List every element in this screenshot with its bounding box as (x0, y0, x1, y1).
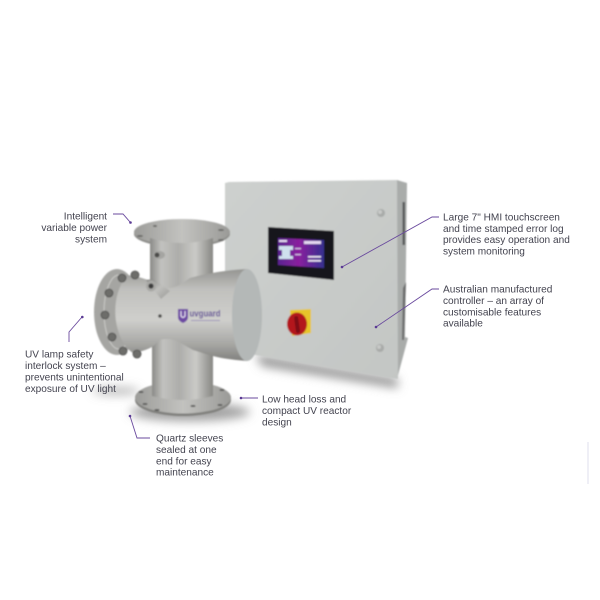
uvguard logo (178, 308, 220, 323)
small sensor port (158, 314, 162, 318)
callout text: customisable features (443, 308, 541, 318)
callout text: Low head loss and (262, 394, 346, 406)
callout text: design (262, 418, 292, 428)
controller cabinet (225, 180, 408, 379)
lower screw (376, 344, 384, 352)
product photo: UV reactor and controller (92, 180, 408, 421)
callout text: sealed at one (156, 445, 217, 456)
upper screw (377, 209, 385, 217)
upper flange (134, 219, 230, 247)
callout text: controller – an array of (443, 296, 544, 307)
callout text: interlock system – (25, 361, 106, 372)
leader line (240, 397, 258, 399)
leader line (129, 415, 150, 438)
callout: Australian manufactured controller (375, 284, 552, 330)
callout text: Large 7" HMI touchscreen (443, 212, 560, 224)
leader line (375, 289, 439, 328)
flange bolts (101, 271, 141, 358)
callout: quartz sleeves (129, 415, 223, 478)
leader line (69, 316, 84, 342)
isolator switch (287, 309, 311, 336)
callout: HMI touchscreen (341, 212, 570, 268)
callout: low head loss (240, 394, 352, 428)
callout text: compact UV reactor (262, 406, 352, 417)
callout text: and time stamped error log (443, 224, 564, 235)
callout text: variable power (41, 223, 108, 234)
callout text: provides easy operation and (443, 235, 570, 246)
callout text: system (75, 234, 107, 246)
leader line (341, 217, 439, 268)
uvguard logo: uvguard (190, 308, 220, 318)
callout text: prevents unintentional (25, 372, 124, 384)
callout text: available (443, 318, 483, 330)
upper nozzle (153, 251, 165, 259)
cabinet side panel (397, 180, 408, 379)
callout text: end for easy (156, 456, 213, 468)
left bolted flange (94, 269, 140, 355)
lower flange (135, 382, 231, 416)
reactor end cap (232, 269, 262, 361)
side nozzle (146, 279, 170, 299)
upper vertical pipe (150, 238, 213, 290)
floor shadows (92, 354, 398, 421)
callout text: Intelligent (64, 212, 107, 222)
callout text: Australian manufactured (443, 284, 552, 296)
callout text: Quartz sleeves (156, 434, 223, 444)
callout text: system monitoring (443, 246, 525, 258)
callout text: maintenance (156, 468, 214, 478)
leader line (113, 214, 132, 224)
UV reactor (94, 219, 262, 416)
HMI touchscreen (268, 227, 334, 280)
callout text: UV lamp safety (25, 350, 94, 360)
callout text: exposure of UV light (25, 384, 116, 395)
lower vertical pipe (152, 335, 213, 400)
callout: UV lamp safety interlock (25, 316, 124, 395)
cabinet front door (225, 180, 398, 379)
horizontal reactor body (115, 269, 247, 361)
callout: intelligent variable power system (41, 212, 132, 246)
